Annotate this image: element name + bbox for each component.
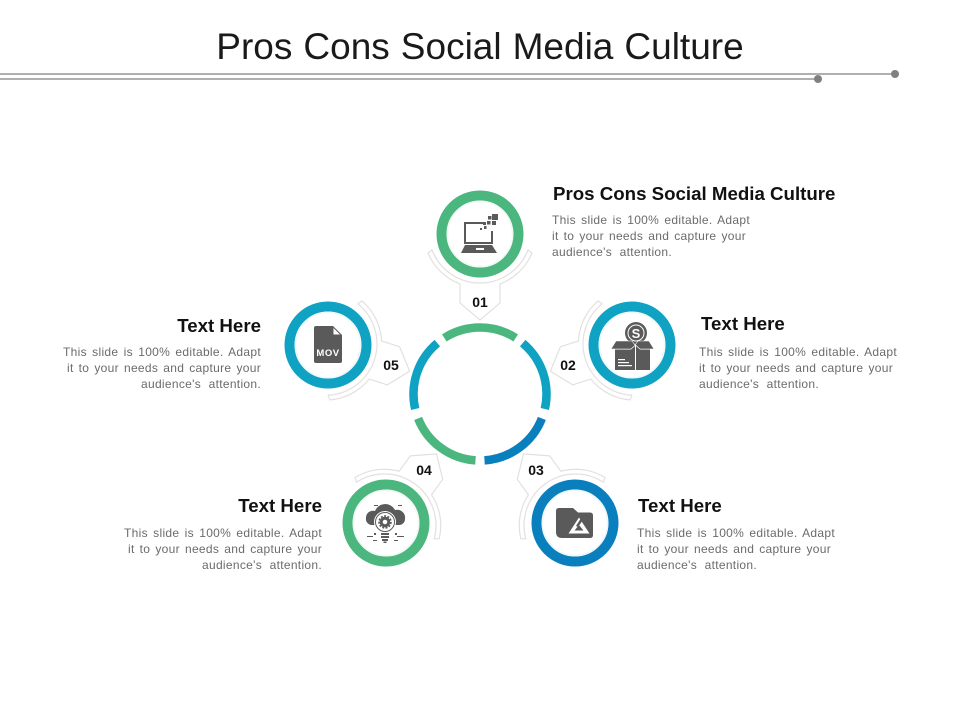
pointer tab 05 [327,300,426,421]
pointer tab 04 [353,423,479,541]
text block 01: audience's attention. [552,245,672,259]
text block 02 [699,345,897,391]
text block 01 [552,213,750,259]
heading 02: Text Here [701,313,785,334]
pointer tab 02 [534,300,633,421]
icon: box with coin: S [632,326,641,341]
number 05: 05 [383,357,399,373]
ring 02 [594,306,670,384]
text block 04: it to your needs and capture your [128,542,322,556]
text block 04 [124,526,322,572]
title: Pros Cons Social Media Culture [216,26,744,67]
icon: folder with drive logo [556,508,593,538]
ring 04 [348,484,424,562]
text block 03 [637,526,835,572]
ring 05 [290,306,366,384]
text block 05: it to your needs and capture your [67,361,261,375]
pointer tab 01 [428,250,532,320]
heading 04: Text Here [238,495,322,516]
icon: MOV file: MOV [316,348,340,359]
text block 03: This slide is 100% editable. Adapt [637,526,835,540]
text block 05: This slide is 100% editable. Adapt [63,345,261,359]
text block 01: it to your needs and capture your [552,229,746,243]
heading 03: Text Here [638,495,722,516]
text block 04: This slide is 100% editable. Adapt [124,526,322,540]
heading 05: Text Here [177,315,261,336]
text block 04: audience's attention. [202,558,322,572]
text block 05 [63,345,261,391]
pointer tab 03 [481,423,607,541]
icon: cloud and gear lightbulb [366,504,405,543]
text block 02: it to your needs and capture your [699,361,893,375]
ring 03 [536,484,614,562]
number 02: 02 [560,357,576,373]
text block 02: This slide is 100% editable. Adapt [699,345,897,359]
text block 03: audience's attention. [637,558,757,572]
icon: laptop with pixels [461,214,498,253]
number 04: 04 [416,462,432,478]
central segmented ring [414,328,546,460]
text block 02: audience's attention. [699,377,819,391]
text block 05: audience's attention. [141,377,261,391]
ring 01 [442,196,518,272]
text block 03: it to your needs and capture your [637,542,831,556]
icon: box with coin [611,322,654,370]
header rule with end dots [0,70,899,83]
text block 01: This slide is 100% editable. Adapt [552,213,750,227]
heading 01: Pros Cons Social Media Culture [553,183,835,204]
number 03: 03 [528,462,544,478]
icon: MOV file [314,326,342,363]
number 01: 01 [472,294,488,310]
